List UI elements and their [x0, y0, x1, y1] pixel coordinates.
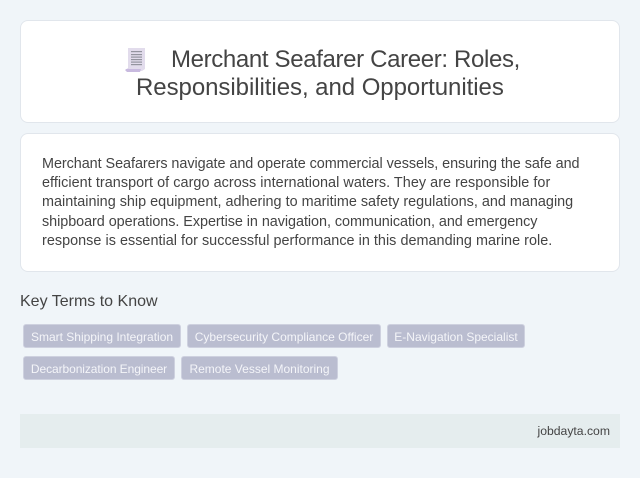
tags — [23, 324, 525, 380]
footer source: jobdayta.com — [538, 424, 610, 438]
panel: description — [20, 133, 620, 272]
title line 1: Merchant Seafarer Career: Roles, — [171, 46, 520, 73]
tag — [387, 324, 525, 348]
tag: Remote Vessel Monitoring — [189, 362, 330, 376]
tag: E-Navigation Specialist — [394, 330, 518, 344]
heading: key terms: Key Terms to Know — [20, 293, 158, 310]
tag — [23, 324, 181, 348]
panel: title — [20, 20, 620, 123]
tag — [187, 324, 381, 348]
tag — [181, 356, 338, 380]
title line 2: Responsibilities, and Opportunities — [136, 74, 504, 101]
tag: Cybersecurity Compliance Officer — [195, 330, 373, 344]
description text — [42, 156, 580, 249]
description text: response is essential for successful performance in this demanding marine role. — [42, 233, 552, 249]
tag: Decarbonization Engineer — [31, 362, 167, 376]
description text: shipboard operations. Expertise in navigation, communication, and emergency — [42, 214, 537, 230]
icon: document scroll — [125, 48, 145, 72]
description text: efficient transport of cargo across international waters. They are responsible for — [42, 175, 550, 191]
footer bar — [20, 414, 620, 448]
description text: maintaining ship equipment, adhering to maritime safety regulations, and managing — [42, 194, 573, 210]
description text: Merchant Seafarers navigate and operate commercial vessels, ensuring the safe and — [42, 156, 580, 172]
tag — [23, 356, 175, 380]
tag: Smart Shipping Integration — [31, 330, 173, 344]
